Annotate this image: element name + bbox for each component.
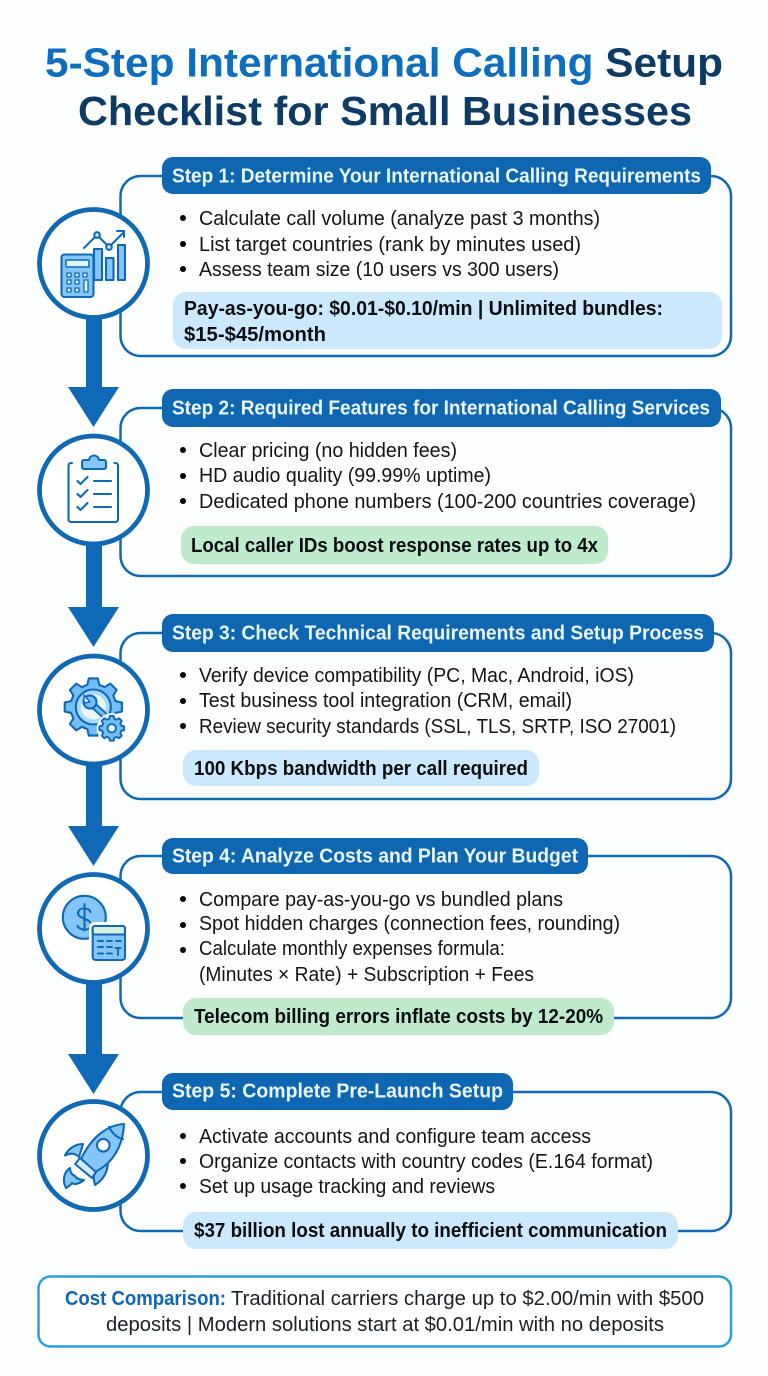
- step 3 checklist: Test business tool integration (CRM, email): [199, 690, 572, 712]
- panel: step 5: [120, 1073, 731, 1249]
- cost comparison text: [65, 1288, 704, 1336]
- step 1 heading: [162, 157, 711, 194]
- step 3 heading: Step 3: Check Technical Requirements and Setup Process: [172, 622, 704, 644]
- step 4 card outline: [120, 856, 731, 1018]
- step 2 heading: [162, 389, 721, 427]
- step 4 checklist: Compare pay-as-you-go vs bundled plans: [199, 889, 563, 911]
- step 1 card outline: [120, 176, 731, 356]
- title: Checklist for Small Businesses: [78, 88, 692, 134]
- step 4 heading: [162, 838, 588, 874]
- arrow: step 2 to 3: [68, 545, 119, 647]
- step 5 heading: Step 5: Complete Pre-Launch Setup: [172, 1080, 503, 1102]
- panel: step 3: [120, 614, 731, 799]
- step 4 callout: [183, 998, 614, 1035]
- step 5 card outline: [120, 1092, 731, 1231]
- step 4 callout: Telecom billing errors inflate costs by 12-20%: [194, 1006, 603, 1028]
- step 4 heading: Step 4: Analyze Costs and Plan Your Budget: [172, 846, 578, 868]
- step 2 callout: [181, 526, 608, 564]
- step 4 checklist: Calculate monthly expenses formula:: [199, 938, 505, 960]
- step 4 checklist: (Minutes × Rate) + Subscription + Fees: [199, 964, 534, 986]
- icon: calculator and growth chart: [40, 210, 148, 318]
- cost comparison text: Traditional carriers charge up to $2.00/min with $500: [231, 1288, 704, 1310]
- step 2 checklist: Clear pricing (no hidden fees): [199, 440, 457, 462]
- cost comparison text: Cost Comparison:: [65, 1288, 226, 1310]
- step 1 callout: [173, 292, 722, 349]
- step 2 heading: Step 2: Required Features for International Calling Services: [172, 398, 710, 420]
- step 1 heading: Step 1: Determine Your International Calling Requirements: [172, 166, 701, 188]
- cost comparison box: [38, 1276, 731, 1346]
- step 2 card outline: [120, 408, 731, 576]
- step 3 checklist: Review security standards (SSL, TLS, SRTP, ISO 27001): [199, 716, 676, 738]
- cost comparison text: deposits | Modern solutions start at $0.01/min with no deposits: [106, 1314, 664, 1336]
- step 3 callout: [183, 750, 539, 786]
- step 5 checklist: Activate accounts and configure team access: [199, 1126, 591, 1148]
- panel: step 1: [120, 157, 731, 356]
- step 4 checklist: Spot hidden charges (connection fees, rounding): [199, 913, 620, 935]
- panel: step 4: [120, 838, 731, 1035]
- step 1 checklist: [180, 208, 600, 281]
- step 2 checklist: [180, 440, 696, 513]
- step 3 checklist: Verify device compatibility (PC, Mac, Android, iOS): [199, 665, 634, 687]
- step 5 heading: [162, 1073, 513, 1110]
- step 3 heading: [162, 614, 714, 652]
- step 5 checklist: Set up usage tracking and reviews: [199, 1176, 495, 1198]
- step 3 checklist: [180, 665, 676, 738]
- icon: clipboard checklist: [40, 436, 148, 544]
- step 5 checklist: Organize contacts with country codes (E.164 format): [199, 1151, 653, 1173]
- title: 5-Step International Calling Setup: [45, 40, 723, 86]
- arrow: step 1 to 2: [68, 318, 119, 427]
- arrow: step 3 to 4: [68, 765, 119, 866]
- step 1 checklist: List target countries (rank by minutes used): [199, 234, 581, 256]
- step 5 callout: $37 billion lost annually to inefficient communication: [194, 1220, 667, 1242]
- step 3 card outline: [120, 633, 731, 799]
- arrow: step 4 to 5: [68, 983, 119, 1094]
- step 4 checklist: [180, 889, 620, 986]
- step 2 checklist: HD audio quality (99.99% uptime): [199, 465, 491, 487]
- step 2 callout: Local caller IDs boost response rates up to 4x: [191, 535, 598, 557]
- step 1 checklist: Calculate call volume (analyze past 3 months): [199, 208, 600, 230]
- step 1 callout: $15-$45/month: [184, 324, 326, 346]
- step 2 checklist: Dedicated phone numbers (100-200 countries coverage): [199, 491, 696, 513]
- title: [45, 40, 723, 134]
- step 1 callout: Pay-as-you-go: $0.01-$0.10/min | Unlimited bundles:: [184, 298, 663, 320]
- icon: rocket: [40, 1102, 148, 1210]
- icon: gear and wrench: [40, 656, 148, 764]
- icon: dollar coin and calculator: [40, 874, 148, 982]
- step 5 checklist: [180, 1126, 653, 1198]
- step 3 callout: 100 Kbps bandwidth per call required: [194, 758, 528, 780]
- step 1 checklist: Assess team size (10 users vs 300 users): [199, 259, 559, 281]
- panel: step 2: [120, 389, 731, 576]
- step 5 callout: [183, 1212, 678, 1249]
